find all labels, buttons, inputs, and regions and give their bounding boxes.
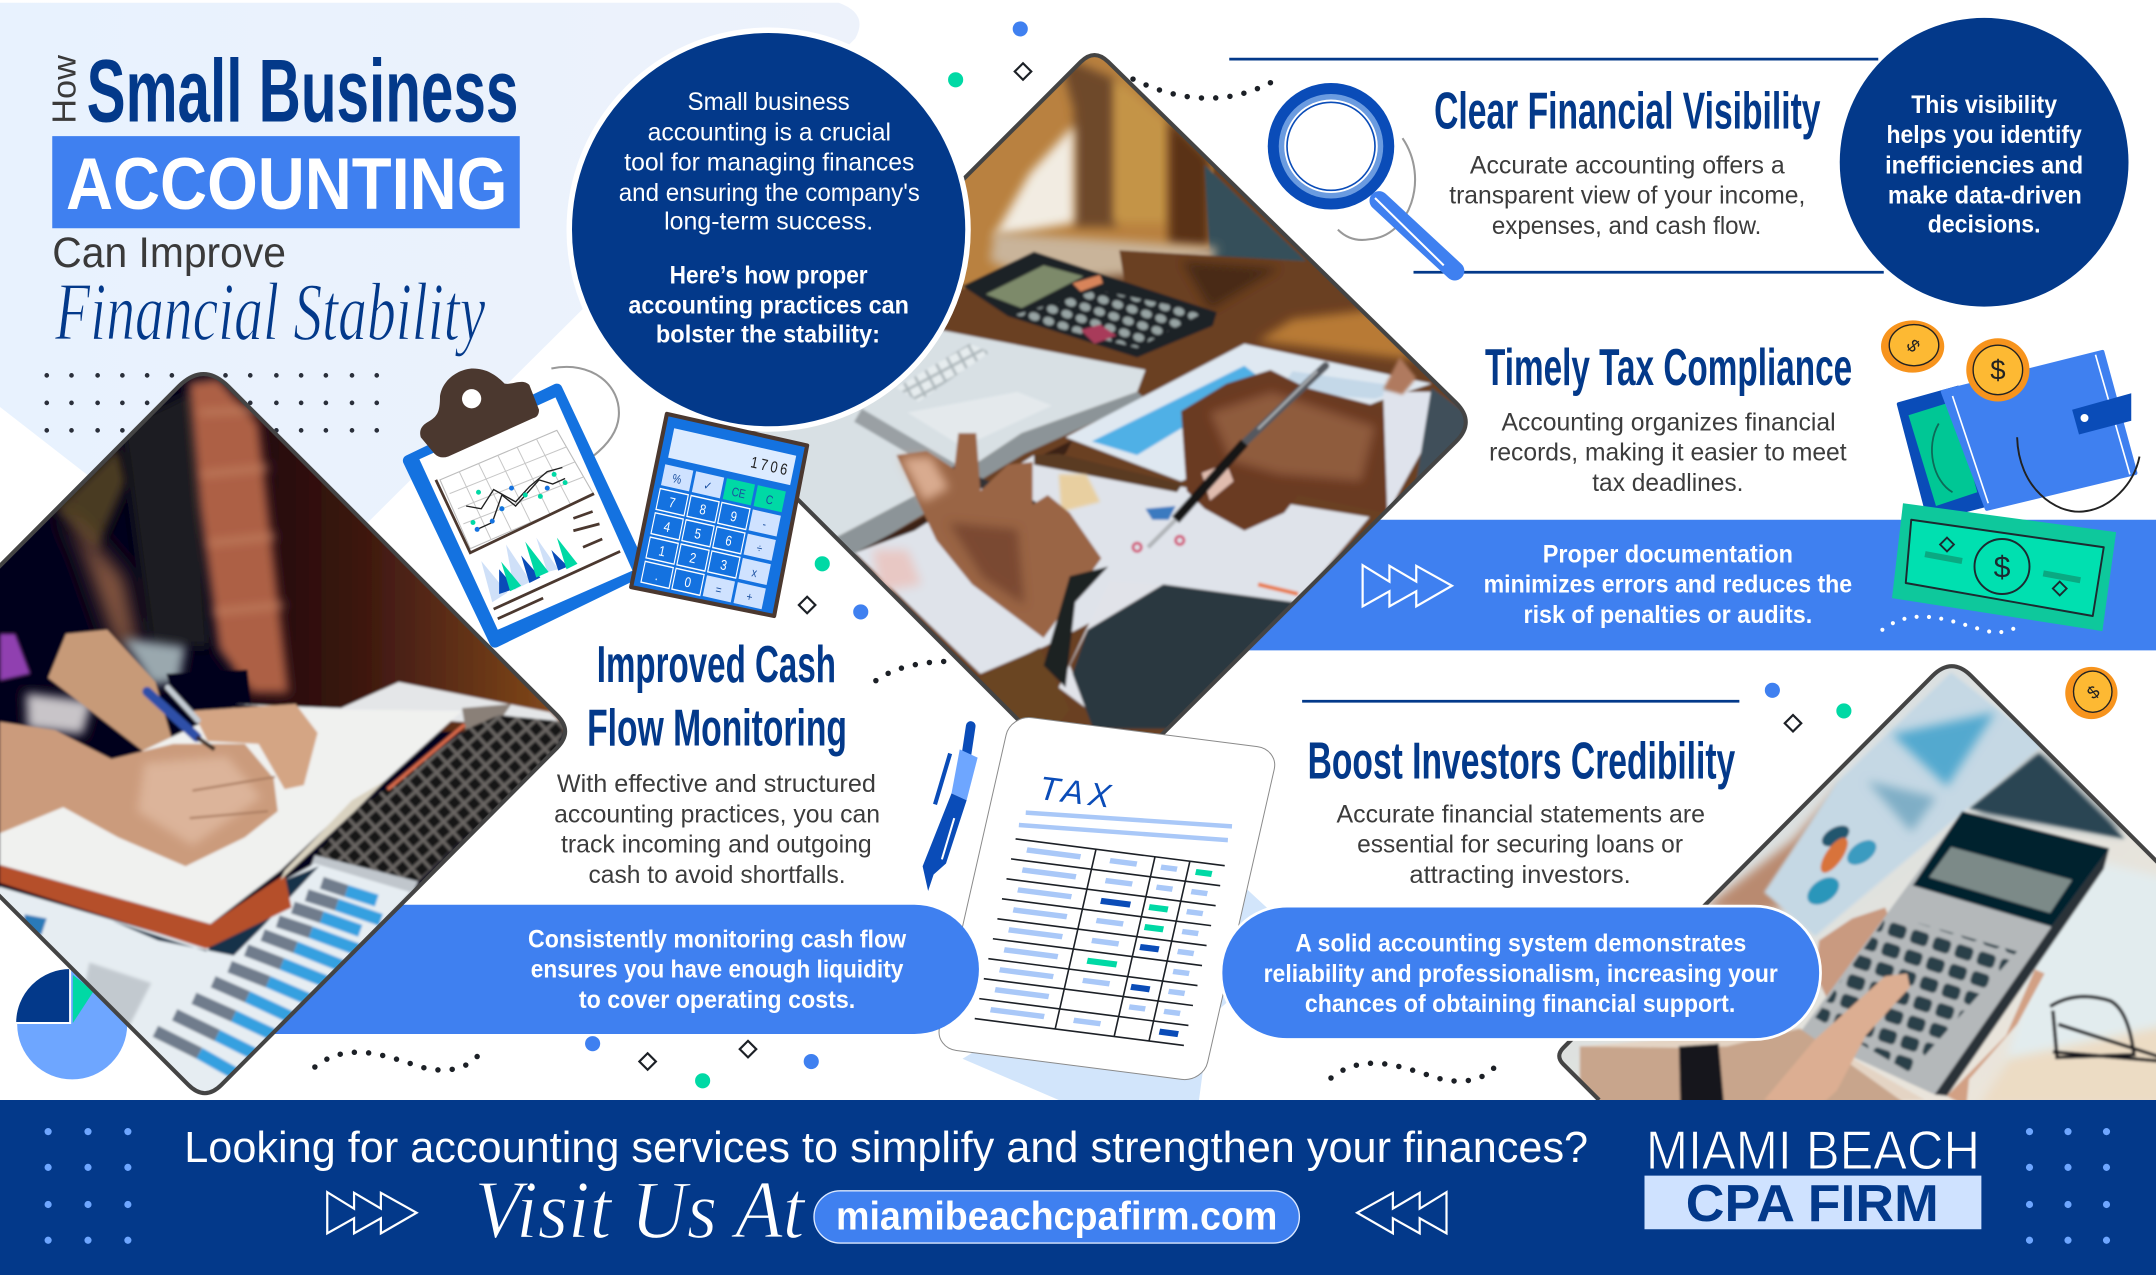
section: improved cash flow monitoring: track incoming and outgoing [561,831,872,859]
icon: calculator: ÷ [755,542,763,556]
icon: calculator: x [751,566,758,581]
arrow: footer right-pointing [327,1192,417,1233]
section: clear financial visibility [1229,59,1884,272]
report on desk [855,455,1370,674]
icon: calculator: C [764,493,774,508]
upper hand [192,704,318,789]
section: improved cash flow monitoring: Consistently monitoring cash flow [528,926,907,953]
notebook cover [0,865,292,949]
intro circle: accounting is a crucial [648,118,891,146]
intro circle: long-term success. [664,208,873,236]
pen [147,692,197,737]
coin [1881,320,1944,373]
notebook page [0,708,462,924]
phone [858,415,952,470]
white cuff and sleeve [1383,392,1431,513]
pie chart icon [15,968,127,1079]
icon: clipboard with charts [408,367,642,642]
section: timely tax compliance: tax deadlines. [1592,469,1744,497]
photo: hands analysing reports [750,53,1468,734]
paper with blue heading [1066,344,1431,481]
title: ACCOUNTING [66,144,507,225]
section: improved cash flow monitoring: With effective and structured [557,770,876,798]
section: boost investors credibility: Accurate financial statements are [1336,800,1705,828]
section: boost investors credibility: Boost Investors Credibility [1308,732,1735,790]
laptop behind [1968,752,2126,841]
title: Financial Stability [54,266,486,358]
icon: calculator: - [761,518,767,532]
icon: coin top right [2065,667,2118,719]
upper arm [48,630,173,752]
icon: calculator: 6 [724,532,734,549]
icon: calculator: ✓ [702,479,713,494]
title [46,41,520,358]
dot grid [44,373,379,433]
icon: calculator: 1 [657,542,667,560]
icon: calculator [631,414,807,616]
website pill: miamibeachcpafirm.com [836,1194,1277,1238]
photo: calculator in hands [1547,646,2156,1107]
section: boost investors credibility: reliability and professionalism, increasing your [1264,961,1778,988]
light panel behind tax document [962,887,1299,1100]
section: boost investors credibility: A solid accounting system demonstrates [1295,931,1746,958]
callout circle: visibility: This visibility [1911,92,2057,119]
title: Small Business [87,41,518,141]
blue band: cash flow [261,905,979,1034]
visit us at: Visit Us At [474,1164,806,1256]
mountain chart on clipboard [481,512,620,619]
laptop [742,330,1145,539]
icon: banknote: $ [1994,552,2011,585]
section: boost investors credibility: chances of obtaining financial support. [1305,991,1735,1018]
section: boost investors credibility: essential for securing loans or [1357,831,1684,859]
icon: coin top right: $ [2083,681,2104,703]
calculator [1800,811,2109,1096]
curved dotted lines [315,79,1496,1081]
section: improved cash flow monitoring: Improved Cash [597,636,836,694]
icon: calculator: % [671,472,682,487]
section: timely tax compliance: minimizes errors and reduces the [1484,572,1852,599]
section: timely tax compliance: Proper documentation [1543,541,1793,568]
coin [1966,338,2030,402]
section: timely tax compliance: Timely Tax Compliance [1485,339,1852,397]
callout circle: visibility [1840,18,2128,307]
palm [1817,906,1888,998]
section: boost investors credibility [1264,701,1778,1018]
forearm and writing hand [0,722,278,866]
section: timely tax compliance: risk of penalties or audits. [1524,602,1812,629]
intro circle [569,30,968,429]
section: improved cash flow monitoring: Flow Monitoring [587,699,847,757]
right hand [1181,370,1396,531]
callout circle: visibility: helps you identify [1886,122,2082,149]
title: How [46,55,83,124]
intro circle: Small business [688,88,850,116]
icon: calculator: 9 [729,508,739,525]
section: improved cash flow monitoring: accounting practices, you can [554,800,880,828]
report paper [1764,672,2043,936]
arrow: band chevrons [1363,565,1452,606]
tax document: TAX [1037,769,1115,815]
icon: calculator: 4 [662,518,672,535]
photo: hands writing in notebook [0,360,591,1114]
icon: magnifying glass [1268,83,1455,271]
title: Can Improve [52,229,286,277]
arrow: footer left-pointing [1357,1192,1446,1233]
section: boost investors credibility: attracting investors. [1409,861,1631,889]
logo: MIAMI BEACH [1646,1119,1980,1181]
left hand [896,433,1101,638]
intro circle: Here’s how proper [670,262,868,289]
callout circle: visibility: decisions. [1928,211,2040,238]
glasses [2050,997,2156,1062]
keyboard [315,715,566,881]
section: improved cash flow monitoring: cash to avoid shortfalls. [588,861,846,889]
blue band: tax compliance [1210,520,2156,650]
section: timely tax compliance [1484,339,1852,629]
callout pill: credibility [1221,906,1820,1040]
section: clear financial visibility: Clear Financial Visibility [1434,83,1820,141]
icon: calculator: = [714,584,723,598]
intro circle: bolster the stability: [656,321,880,348]
section: improved cash flow monitoring: to cover operating costs. [579,987,855,1014]
icon: calculator: 0 [683,573,693,591]
section: clear financial visibility: Accurate accounting offers a [1470,151,1786,179]
coin: $ [1902,335,1924,356]
icon: calculator: CE [730,486,747,502]
icon: pen [923,726,978,891]
logo: CPA FIRM [1686,1175,1939,1233]
callout circle: visibility: inefficiencies and [1885,152,2083,179]
icon: calculator: 5 [693,525,703,542]
tax document [935,715,1279,1082]
callout circle: visibility: make data-driven [1888,183,2082,210]
section: improved cash flow monitoring: ensures you have enough liquidity [531,957,904,984]
background panel [0,3,860,611]
calculator in photo [962,252,1217,358]
hands [1580,1029,1910,1107]
pen in photo [1244,366,1326,443]
bright desk [2008,863,2156,1058]
hand behind report [1708,785,1834,912]
paper behind notebook [234,682,564,726]
logo [1644,1119,1981,1233]
icon: calculator: 8 [698,501,708,518]
icon: calculator: 7 [667,494,677,511]
icon: calculator: 1706 [749,454,792,480]
section: clear financial visibility: expenses, and cash flow. [1492,212,1761,240]
report with bars [0,864,411,1114]
table grid [975,839,1225,1045]
coin: $ [1990,355,2006,386]
section: timely tax compliance: Accounting organizes financial [1502,408,1836,436]
line chart on clipboard [436,430,594,553]
intro circle: tool for managing finances [624,149,914,177]
watch, cuff and suit [1030,646,1042,654]
section: clear financial visibility: transparent view of your income, [1449,182,1805,210]
table bars [990,847,1212,1036]
icon: banknote [1892,503,2116,631]
footer headline: Looking for accounting services to simplify and strengthen your finances? [184,1123,1588,1172]
curved dots under banknote [1882,617,2021,633]
watch strap [1679,1044,1724,1107]
icon: calculator: . [654,567,660,584]
footer [0,1100,2156,1275]
intro circle: and ensuring the company's [619,179,920,207]
icon: calculator: 3 [719,556,729,574]
icon: wallet with coins [1881,320,2140,520]
icon: calculator: 2 [688,549,698,567]
intro circle: accounting practices can [628,293,909,320]
icon: calculator: + [745,591,754,605]
section: timely tax compliance: records, making it easier to meet [1489,439,1847,467]
section: improved cash flow monitoring [528,636,907,1014]
footer dot grid [45,1128,2110,1244]
accent dots [585,21,1851,1088]
